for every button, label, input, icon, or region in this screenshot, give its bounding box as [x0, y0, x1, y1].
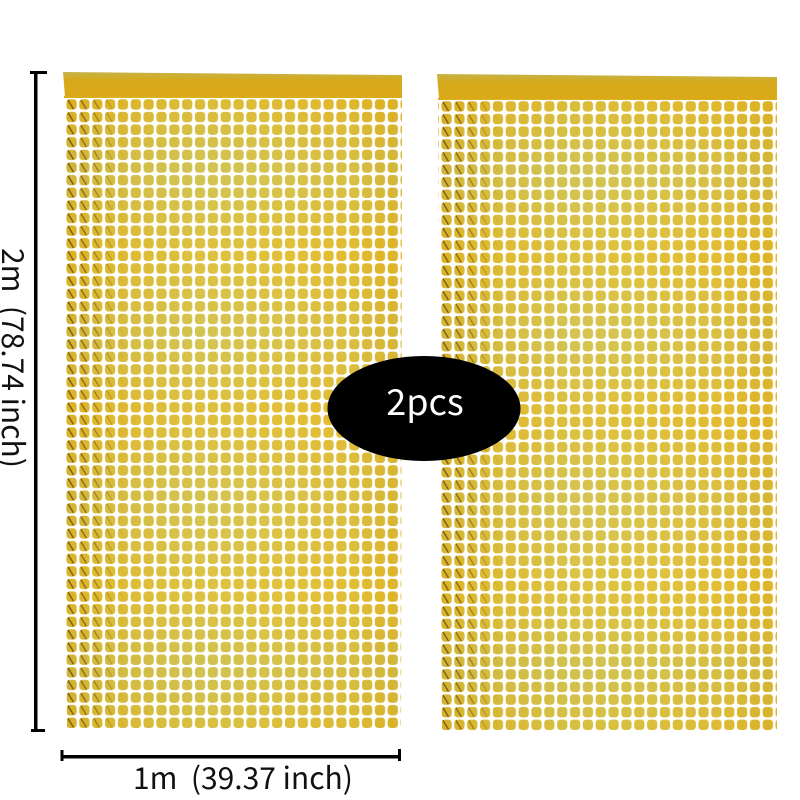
width dimension bracket [60, 749, 401, 761]
right curtain header band [437, 74, 777, 100]
width label: 1m (39.37 inch) [133, 754, 353, 798]
left curtain fringe panel [64, 96, 402, 730]
quantity badge: 2pcs [386, 374, 464, 426]
left curtain [60, 72, 405, 733]
left curtain header band [63, 72, 402, 98]
height dimension bracket [30, 71, 47, 732]
quantity badge [328, 356, 520, 461]
right curtain fringe panel [438, 98, 777, 732]
right curtain [436, 74, 781, 735]
